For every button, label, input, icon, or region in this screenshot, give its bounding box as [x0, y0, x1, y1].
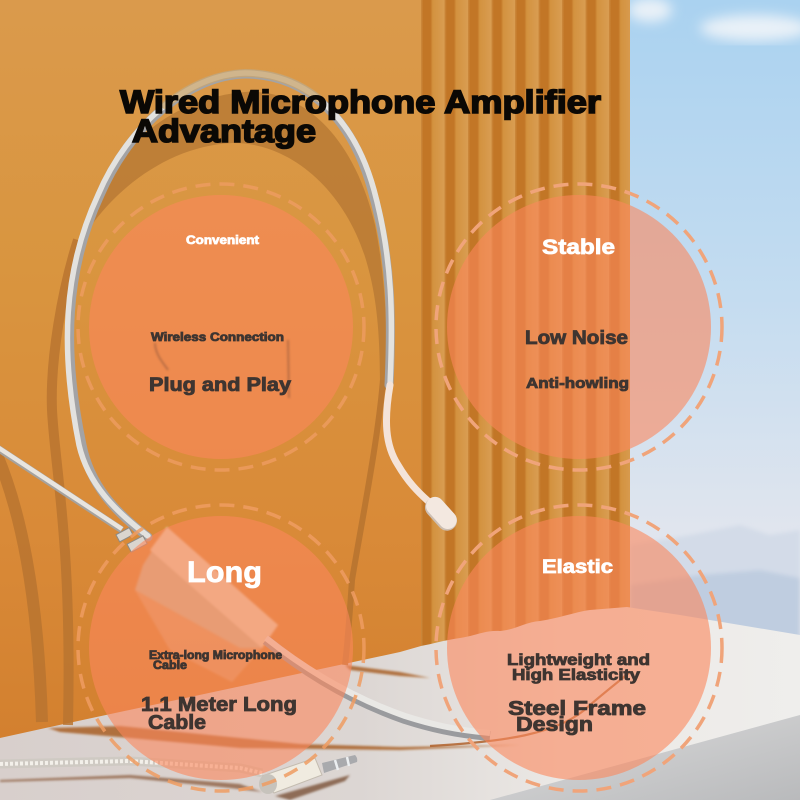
output cable: [266, 640, 490, 736]
title: Advantage: [132, 113, 316, 149]
microphone tip: [421, 493, 461, 535]
cable clip: [116, 528, 147, 552]
boom arm: [386, 385, 428, 501]
feature: wireless connection: Wireless Connection: [151, 330, 284, 344]
panel: Stable: [436, 184, 722, 470]
circle: [89, 195, 353, 459]
feature: extra-long microphone cable: Extra-long Microphone: [149, 650, 282, 662]
floor shadows: [0, 665, 520, 800]
feature: extra-long microphone cable: [149, 650, 282, 672]
dashed ring: [436, 505, 722, 791]
dashed ring: [78, 505, 364, 791]
dashed ring: [436, 184, 722, 470]
feature: plug and play: Plug and Play: [149, 375, 291, 396]
title: [120, 84, 601, 149]
distant mountains: [630, 525, 800, 640]
heading: Long: [187, 556, 262, 589]
sky: [620, 0, 800, 660]
wall shadows: [0, 240, 383, 725]
side wire: [0, 447, 122, 530]
thin floor line: [430, 672, 630, 746]
circle: [447, 516, 711, 780]
feature: steel frame design: Steel Frame: [508, 698, 646, 720]
heading: Elastic: [542, 557, 613, 578]
feature: 1.1 meter long cable: [141, 694, 297, 734]
feature: steel frame design: Design: [516, 714, 593, 736]
feature: anti-howling: Anti-howling: [526, 375, 629, 392]
heading: Convenient: [186, 235, 259, 247]
braided cable: [0, 761, 262, 773]
title: Wired Microphone Amplifier: [120, 84, 601, 120]
panel: Convenient: [78, 184, 364, 470]
ribbed pillars: [421, 0, 630, 650]
feature: lightweight and high elasticity: High Elasticity: [512, 667, 640, 684]
feature: 1.1 meter long cable: Cable: [148, 712, 206, 734]
clouds: [628, 0, 800, 41]
feature: low noise: Low Noise: [525, 328, 628, 349]
dashed ring: [78, 184, 364, 470]
control box: [135, 527, 278, 682]
panel: Elastic: [436, 505, 722, 791]
circle: [89, 516, 353, 780]
panel: Long: [78, 505, 364, 791]
audio jack: [259, 755, 357, 794]
feature: lightweight and high elasticity: [507, 652, 650, 684]
feature: 1.1 meter long cable: 1.1 Meter Long: [141, 694, 297, 716]
floor surface: [0, 607, 800, 800]
headband shadow: [76, 92, 387, 390]
feature: extra-long microphone cable: Cable: [153, 660, 187, 672]
headband cable: [67, 73, 391, 537]
smudge: [155, 340, 289, 398]
orange wall: [0, 0, 630, 760]
heading: Stable: [542, 236, 615, 259]
floor front face: [490, 715, 800, 800]
feature: steel frame design: [508, 698, 646, 736]
feature: lightweight and high elasticity: Lightweight and: [507, 652, 650, 669]
microphone: [0, 73, 630, 794]
circle: [447, 195, 711, 459]
